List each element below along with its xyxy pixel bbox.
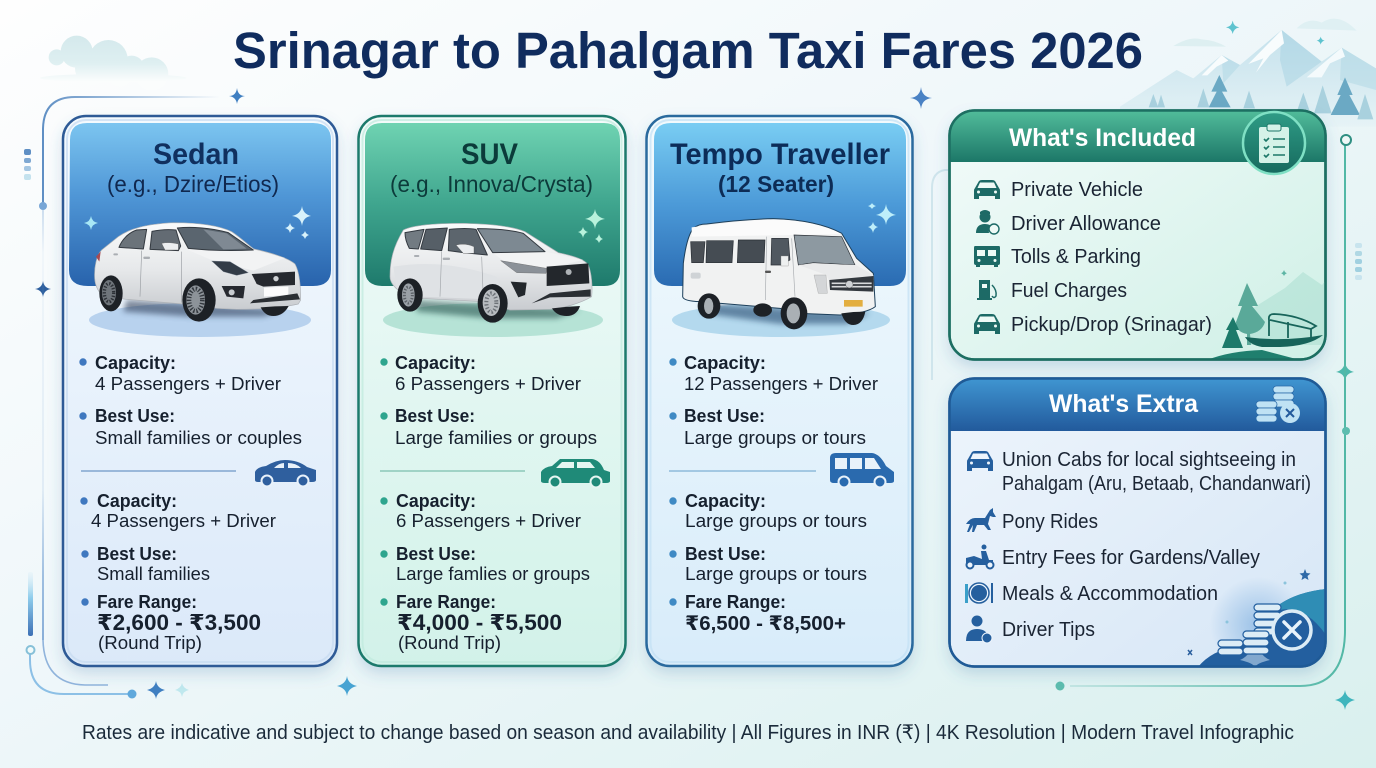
bullet list: tempo top [669,353,878,448]
bullet list: sedan top: Capacity: [95,353,176,373]
icon: coins with cross [1256,386,1300,423]
bullet list: suv fares: Fare Range: [396,592,496,612]
panel: suv [358,116,626,666]
bullet list: suv fares: Best Use: [396,544,476,564]
bullet list: tempo top: Capacity: [684,353,766,373]
bullet list: tempo fares: Large groups or tours [685,510,867,531]
icon: suv car [390,223,592,323]
bullet list: sedan fares: Small families [97,563,210,584]
heading: what's extra: What's Extra [1049,390,1199,418]
shadow disc: suv [383,303,603,337]
icon: union cab [967,451,993,471]
subheading: suv examples: (e.g., Innova/Crysta) [390,171,593,197]
bullet list: tempo fares: Large groups or tours [685,563,867,584]
bullet list: sedan fares: Capacity: [97,491,177,511]
footer note: Rates are indicative and subject to change based on season and availability | All Figures in INR (₹) | 4K Resolution | Modern Travel Infographic [82,722,1294,744]
bullet list: suv fares: ₹4,000 - ₹5,500 [397,610,562,635]
icon: pickup car [974,314,1000,334]
left connector lines [24,97,220,698]
shadow disc: tempo [672,303,890,337]
icon: small van [830,453,894,488]
icon: plate and fork [965,583,993,603]
bullet list: tempo fares: Capacity: [685,491,766,511]
list: included items: Pickup/Drop (Srinagar) [1011,313,1212,336]
decorative sparkles [35,87,1355,710]
panel: what's included [949,110,1326,360]
bullet list: tempo top: Large groups or tours [684,427,866,448]
list: extra items: Meals & Accommodation [1002,582,1218,605]
bullet list: sedan fares: (Round Trip) [98,632,202,653]
icon: small sedan [255,460,316,486]
list: extra items: Pony Rides [1002,510,1098,533]
bullet list: sedan fares: ₹2,600 - ₹3,500 [97,610,261,635]
bullet list: suv fares: Capacity: [396,491,476,511]
list: extra items: Driver Tips [1002,618,1095,641]
heading: tempo traveller: Tempo Traveller [670,138,890,171]
icon: fuel pump [977,280,996,300]
shadow disc: sedan [89,303,311,337]
bullet list: tempo top: 12 Passengers + Driver [684,373,878,394]
bullet list: tempo fares [669,491,867,635]
bullet list: sedan fares: Fare Range: [97,592,197,612]
icon: toll bus [974,246,1000,267]
heading: what's included: What's Included [1009,124,1196,152]
bullet list: sedan top: 4 Passengers + Driver [95,373,281,394]
right connector lines [932,135,1362,690]
sparkles: tempo [868,203,896,233]
title: Srinagar to Pahalgam Taxi Fares 2026 [233,22,1143,79]
bullet list: suv fares: 6 Passengers + Driver [396,510,581,531]
bullet list: sedan fares: 4 Passengers + Driver [91,510,276,531]
list: extra items: Union Cabs for local sightseeing in [1002,448,1296,471]
subheading: sedan examples: (e.g., Dzire/Etios) [107,171,279,197]
sparkles: sedan [84,206,311,239]
bullet list: suv top: Best Use: [395,406,475,426]
bullet list: sedan top: Small families or couples [95,427,302,448]
scenery: shikara boat and trees [1207,270,1326,360]
icon: tempo van [683,219,875,329]
list: included items: Fuel Charges [1011,279,1127,302]
icon: sedan car [95,223,301,322]
icon: pony [966,508,996,532]
subheading: 12 seater: (12 Seater) [718,171,834,197]
icon: private vehicle [974,180,1000,199]
list: extra items: Pahalgam (Aru, Betaab, Chandanwari) [1002,472,1311,495]
sparkles: suv [578,209,605,243]
bullet list: suv top [380,353,597,448]
list: included items: Private Vehicle [1011,178,1143,201]
heading: sedan: Sedan [153,138,239,171]
panel: tempo traveller [646,116,912,666]
icon: small suv [541,459,610,488]
bullet list: sedan top [79,353,302,448]
icon: scooter [966,544,994,568]
bullet list: tempo top: Best Use: [684,406,765,426]
bullet list: suv top: 6 Passengers + Driver [395,373,581,394]
list: included items: Tolls & Parking [1011,245,1141,268]
list: extra items: Entry Fees for Gardens/Valley [1002,546,1261,569]
bullet list: suv fares: (Round Trip) [398,632,501,653]
bullet list: sedan top: Best Use: [95,406,175,426]
panel: sedan [63,116,337,666]
icon: clipboard badge [1243,112,1305,174]
heading: suv: SUV [461,138,518,171]
bullet list: sedan fares: Best Use: [97,544,177,564]
list: extra items [1002,448,1311,641]
bullet list: tempo fares: Fare Range: [685,592,786,612]
bullet list: tempo fares: Best Use: [685,544,766,564]
clouds top left [40,36,187,91]
bullet list: suv fares: Large famlies or groups [396,563,590,584]
bullet list: tempo fares: ₹6,500 - ₹8,500+ [685,613,846,635]
bullet list: suv fares [380,491,590,653]
bullet list: suv top: Large families or groups [395,427,597,448]
icon: driver tips [966,616,992,643]
list: included items [1011,178,1212,336]
corner art: coins and cross [1188,569,1326,673]
bullet list: suv top: Capacity: [395,353,476,373]
mountains top right [1120,19,1376,127]
icon: driver [976,210,999,234]
list: included items: Driver Allowance [1011,212,1161,235]
bullet list: sedan fares [80,491,276,653]
panel: what's extra [949,378,1326,673]
